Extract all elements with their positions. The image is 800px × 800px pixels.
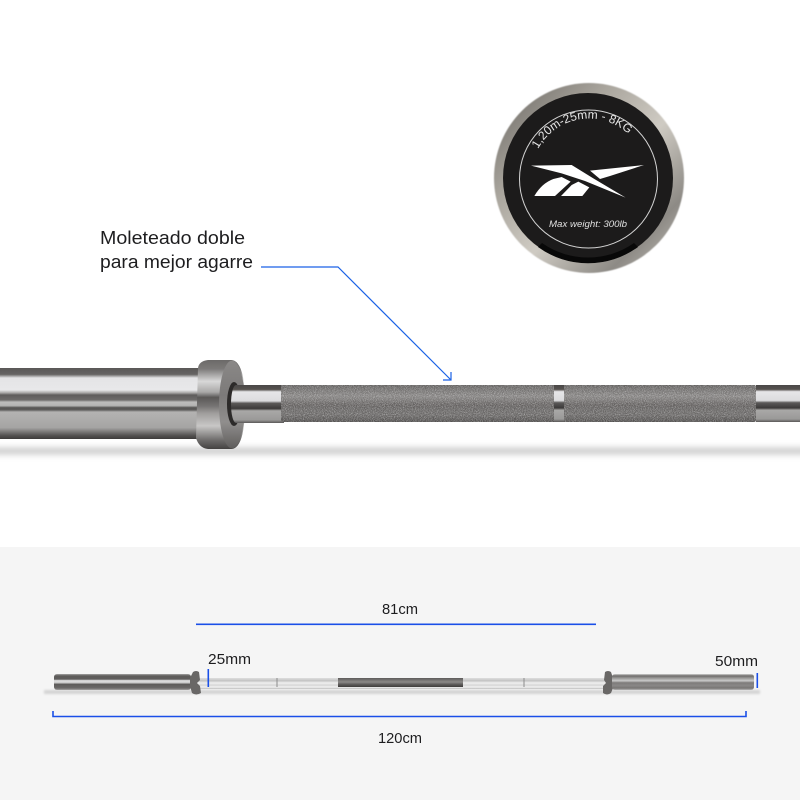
dimension bracket: 120cm (53, 711, 746, 716)
centre ring (554, 385, 564, 422)
right shaft (756, 385, 800, 422)
dimension tick: 25mm diameter (208, 669, 209, 687)
mini left sleeve (54, 674, 191, 690)
mini right sleeve (612, 674, 754, 690)
heading: double knurling callout text: para mejor agarre (100, 252, 253, 272)
mini knurl centre (338, 678, 463, 687)
panel: dimensions background (0, 547, 800, 800)
mini shaft (198, 678, 606, 689)
icon: barbell end cap with logo (493, 82, 685, 274)
full barbell diagram (44, 671, 760, 694)
collar (196, 360, 245, 449)
mini right collar (603, 671, 613, 694)
mini tick marks (277, 678, 524, 687)
arrow: callout leader to knurling (261, 267, 451, 380)
knurled grip (281, 385, 756, 422)
mini left collar (190, 671, 201, 694)
heading: double knurling callout text: Moleteado doble (100, 228, 245, 248)
cap text: max weight: Max weight: 300lb (549, 219, 627, 230)
dimension label: 120cm: 120cm (378, 731, 422, 747)
dimension label: 50mm: 50mm (715, 654, 758, 670)
logo: Reebok delta (531, 165, 644, 198)
bar shadow (0, 447, 800, 455)
dimension label: 81cm: 81cm (382, 602, 418, 618)
dimension label: 25mm: 25mm (208, 652, 251, 668)
sleeve (0, 368, 198, 439)
cap text: bar specification: 1,20m-25mm - 8KG (532, 112, 632, 148)
dimension line: 81cm (196, 624, 596, 625)
inner shaft (236, 385, 284, 423)
heading: double knurling callout text (100, 228, 253, 272)
dimension tick: 50mm diameter (756, 673, 758, 688)
barbell close-up (0, 360, 800, 455)
mini bar shadow (44, 690, 760, 694)
